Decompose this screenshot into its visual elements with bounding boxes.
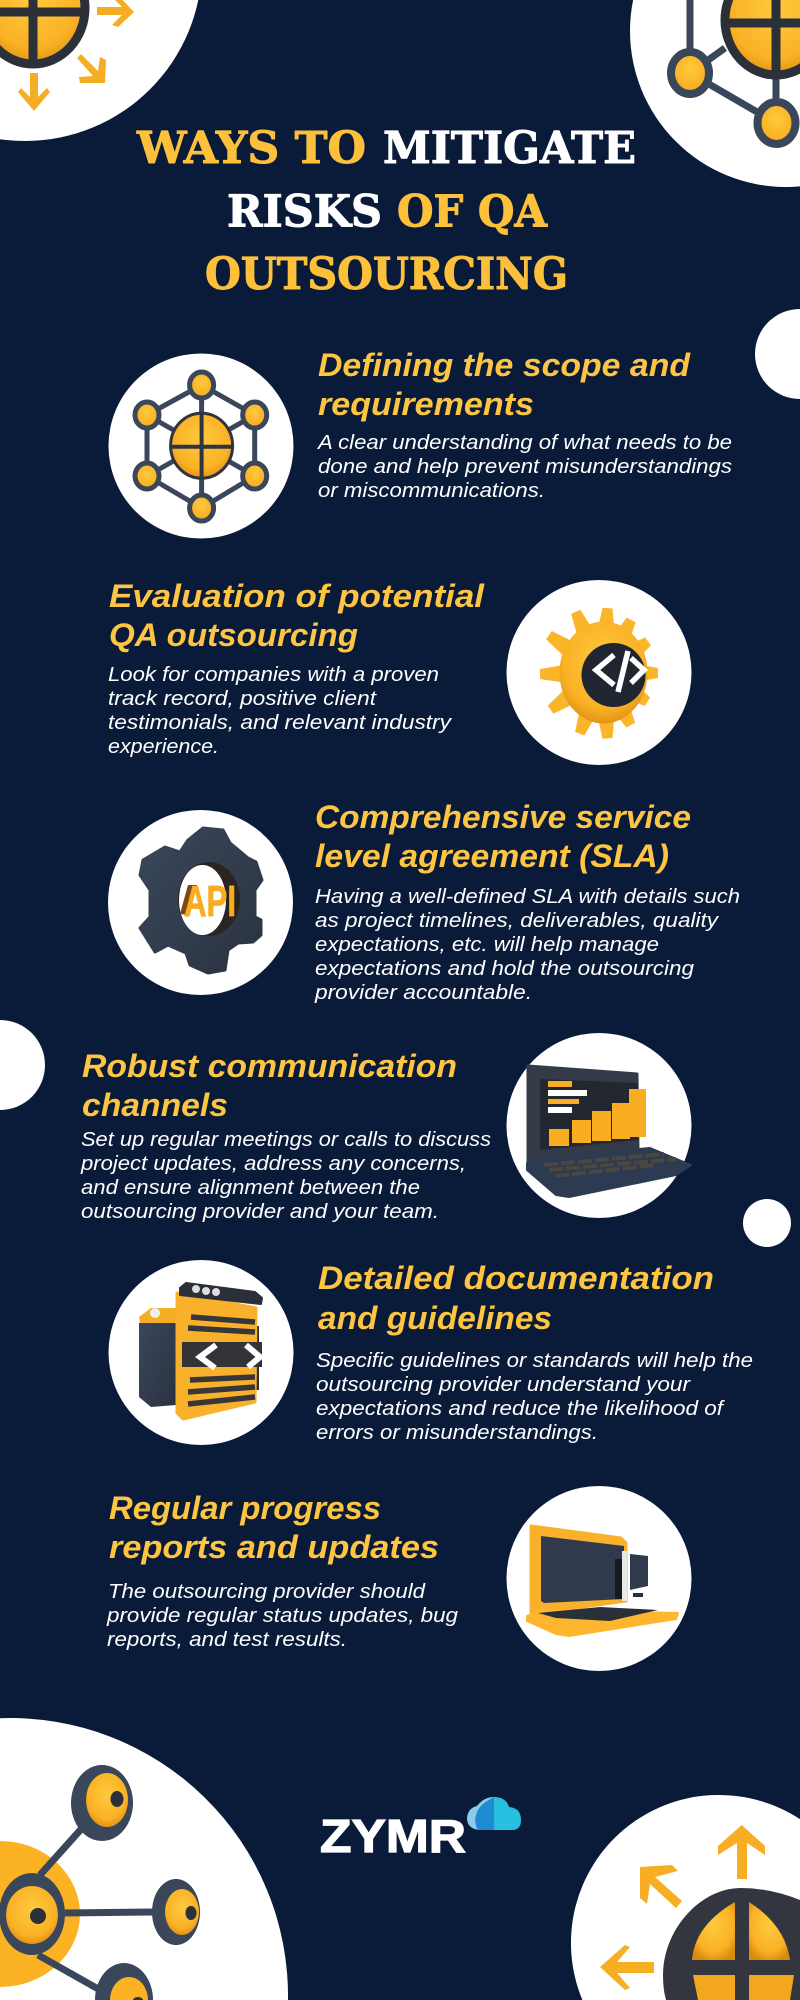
bottom-right white circle with globe and arrows xyxy=(571,1795,800,2000)
body text: Specific guidelines or standards will help the xyxy=(316,1349,753,1372)
heading: Comprehensive service xyxy=(315,799,691,835)
body text: A clear understanding of what needs to be xyxy=(316,431,732,454)
heading: QA outsourcing xyxy=(109,617,358,653)
icon: laptop with bar chart xyxy=(506,1033,692,1218)
panel: comprehensive service level agreement xyxy=(108,799,740,1004)
heading: Defining the scope and xyxy=(318,347,692,383)
heading: Regular progress xyxy=(109,1490,381,1526)
body text: outsourcing provider and your team. xyxy=(81,1200,439,1223)
title: MITIGATE xyxy=(383,123,636,174)
heading xyxy=(318,347,692,422)
title: OF QA xyxy=(397,186,548,238)
panel: detailed documentation and guidelines xyxy=(108,1260,753,1445)
body text: Having a well-defined SLA with details such xyxy=(315,885,740,908)
heading: Evaluation of potential xyxy=(109,578,485,614)
title: WAYS TO xyxy=(136,123,366,174)
title: RISKS xyxy=(227,186,382,238)
icon: network globe xyxy=(108,354,294,538)
body text: track record, positive client xyxy=(108,687,377,710)
panel: robust communication channels xyxy=(80,1033,691,1223)
top-left white circle with globe and arrows xyxy=(0,0,202,141)
body text: expectations and hold the outsourcing xyxy=(315,957,695,980)
icon: yellow computer xyxy=(506,1486,692,1671)
heading: reports and updates xyxy=(109,1529,439,1565)
icon: code gear xyxy=(506,580,692,765)
heading: and guidelines xyxy=(318,1300,552,1336)
body text: expectations and reduce the likelihood of xyxy=(316,1397,726,1420)
body text xyxy=(80,1128,491,1223)
decorative circle left xyxy=(0,1020,45,1110)
heading xyxy=(318,1260,714,1336)
heading xyxy=(82,1048,457,1123)
heading: Detailed documentation xyxy=(318,1260,714,1296)
decorative circle right lower xyxy=(743,1199,791,1247)
body text: expectations, etc. will help manage xyxy=(315,933,659,956)
body text: provider accountable. xyxy=(314,981,532,1004)
body text: reports, and test results. xyxy=(107,1628,347,1651)
body text: errors or misunderstandings. xyxy=(316,1421,598,1444)
body text xyxy=(106,1580,459,1651)
icon: cloud xyxy=(467,1797,521,1830)
icon: API gear xyxy=(108,810,293,995)
body text xyxy=(314,885,740,1004)
body text: and ensure alignment between the xyxy=(81,1176,420,1199)
body text: Set up regular meetings or calls to discuss xyxy=(81,1128,491,1151)
heading xyxy=(109,578,485,653)
title xyxy=(136,123,636,300)
bottom-left white circle with node network xyxy=(0,1718,288,2000)
panel: defining the scope xyxy=(108,347,732,538)
panel: evaluation of potential QA outsourcing xyxy=(108,578,692,765)
body text: as project timelines, deliverables, quality xyxy=(315,909,720,932)
body text: Look for companies with a proven xyxy=(108,663,439,686)
decorative circle right upper xyxy=(755,309,800,399)
heading: requirements xyxy=(318,386,534,422)
title: OUTSOURCING xyxy=(205,249,568,300)
body text: provide regular status updates, bug xyxy=(106,1604,459,1627)
panel: regular progress reports and updates xyxy=(106,1486,691,1671)
body text: testimonials, and relevant industry xyxy=(108,711,453,734)
logo: ZYMR xyxy=(320,1797,521,1862)
heading: level agreement (SLA) xyxy=(315,838,669,874)
heading: Robust communication xyxy=(82,1048,457,1084)
body text xyxy=(316,1349,753,1444)
logo: ZYMR: ZYMR xyxy=(320,1810,466,1862)
top-right white circle with network globe xyxy=(630,0,800,187)
heading: channels xyxy=(82,1087,228,1123)
body text: The outsourcing provider should xyxy=(108,1580,426,1603)
body text xyxy=(316,431,732,502)
icon: API gear: API xyxy=(184,877,236,926)
body text: or miscommunications. xyxy=(318,479,545,502)
heading xyxy=(109,1490,439,1565)
heading xyxy=(315,799,691,874)
body text: outsourcing provider understand your xyxy=(316,1373,691,1396)
body text xyxy=(108,663,453,758)
body text: experience. xyxy=(108,735,219,758)
icon: code documents xyxy=(108,1260,294,1445)
body text: done and help prevent misunderstandings xyxy=(318,455,732,478)
body text: project updates, address any concerns, xyxy=(80,1152,466,1175)
